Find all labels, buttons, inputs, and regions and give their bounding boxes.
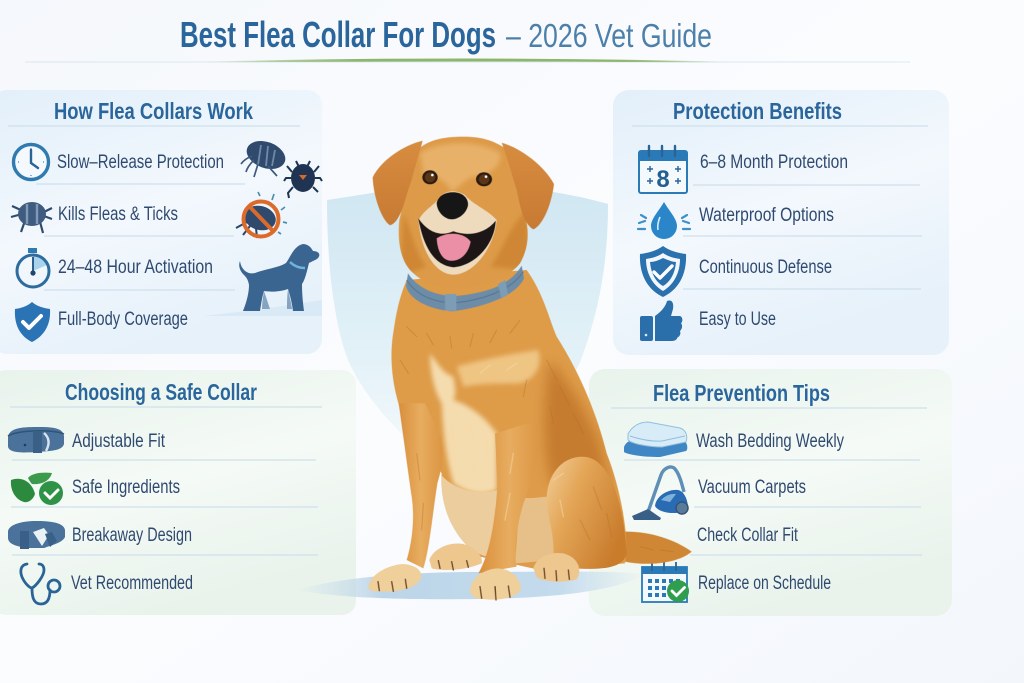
text: 24-48 hour activation: 24–48 Hour Activation [58,257,213,278]
icon: clock [14,144,48,180]
dog tongue [437,234,471,261]
title: Best Flea Collar For Dogs [180,14,496,55]
panel: flea prevention tips [589,369,952,616]
text: wash bedding weekly: Wash Bedding Weekly [696,431,844,452]
icon: stethoscope [21,564,60,604]
text: vacuum carpets: Vacuum Carpets [698,477,806,498]
dog front leg left [399,403,443,568]
dog tail [622,532,692,564]
dog front paw left [368,564,421,592]
dog back paw right [533,553,579,582]
dog right ear [502,143,554,229]
text: 6-8 month protection: 6–8 Month Protection [700,152,848,173]
icon: water drop [638,202,690,239]
dog torso [391,270,626,568]
icon: stopwatch [17,248,49,287]
heading: choosing a safe collar: Choosing a Safe Collar [65,379,257,405]
text: adjustable fit: Adjustable Fit [72,431,166,452]
text: replace on schedule: Replace on Schedule [698,573,831,594]
dog back paw left [429,544,482,570]
panel: choosing a safe collar [0,370,356,615]
dog collar [406,266,524,311]
icon: flea [241,136,289,177]
dog front leg right [478,422,540,573]
icon: thumbs up [640,300,682,341]
icon: breakaway collar [8,521,65,549]
panel: how flea collars work [0,90,322,354]
dog belly [440,473,498,557]
dog fur strokes [400,320,673,552]
icon: shield with check [640,246,686,297]
dog shoulder patch [457,350,540,387]
icon: calendar with 8: 8 [656,166,670,193]
icon: mite [11,202,52,233]
icon: shield with check [15,302,50,342]
text: check collar fit: Check Collar Fit [697,525,799,546]
text: vet recommended: Vet Recommended [71,573,193,594]
dog chest [430,353,497,493]
text: continuous defense: Continuous Defense [699,257,832,278]
dog back shading [544,360,610,487]
text: waterproof options: Waterproof Options [699,205,834,226]
icon: crossed-out flea [236,192,287,238]
heading: flea prevention tips: Flea Prevention Tips [653,380,830,406]
icon: folded towels [624,422,687,457]
dog front paw right [470,568,521,600]
icon: ground shadow [204,300,322,316]
heading: how flea collars work: How Flea Collars Work [54,98,253,124]
icon: collar [8,427,64,453]
title: – 2026 Vet Guide [506,17,712,54]
dog head [399,137,530,289]
heading: protection benefits: Protection Benefits [673,98,842,124]
text: breakaway design: Breakaway Design [72,525,192,546]
text: full-body coverage: Full-Body Coverage [58,309,188,330]
icon: calendar with check [642,562,689,602]
icon: leaves with check [11,473,63,505]
dog rear thigh [547,457,627,569]
background shield behind dog [327,182,608,482]
text: safe ingredients: Safe Ingredients [72,477,180,498]
icon: dog silhouette [239,244,319,311]
icon: vacuum cleaner [632,467,688,520]
dog left ear [373,141,423,225]
ground shadow under dog [296,572,645,599]
illustration: golden dog with collar [368,137,692,600]
dog muzzle [419,191,497,275]
icon: calendar with 8 [639,146,687,193]
text: kills fleas and ticks: Kills Fleas & Ticks [58,204,178,225]
dog nose [437,192,468,219]
panel: protection benefits [613,90,949,355]
dog right eye [476,172,492,186]
icon: tick [284,161,322,198]
text: easy to use: Easy to Use [699,309,776,330]
text: slow-release protection: Slow–Release Protection [57,152,224,173]
dog mouth [418,218,496,267]
dog left eye [422,170,438,184]
